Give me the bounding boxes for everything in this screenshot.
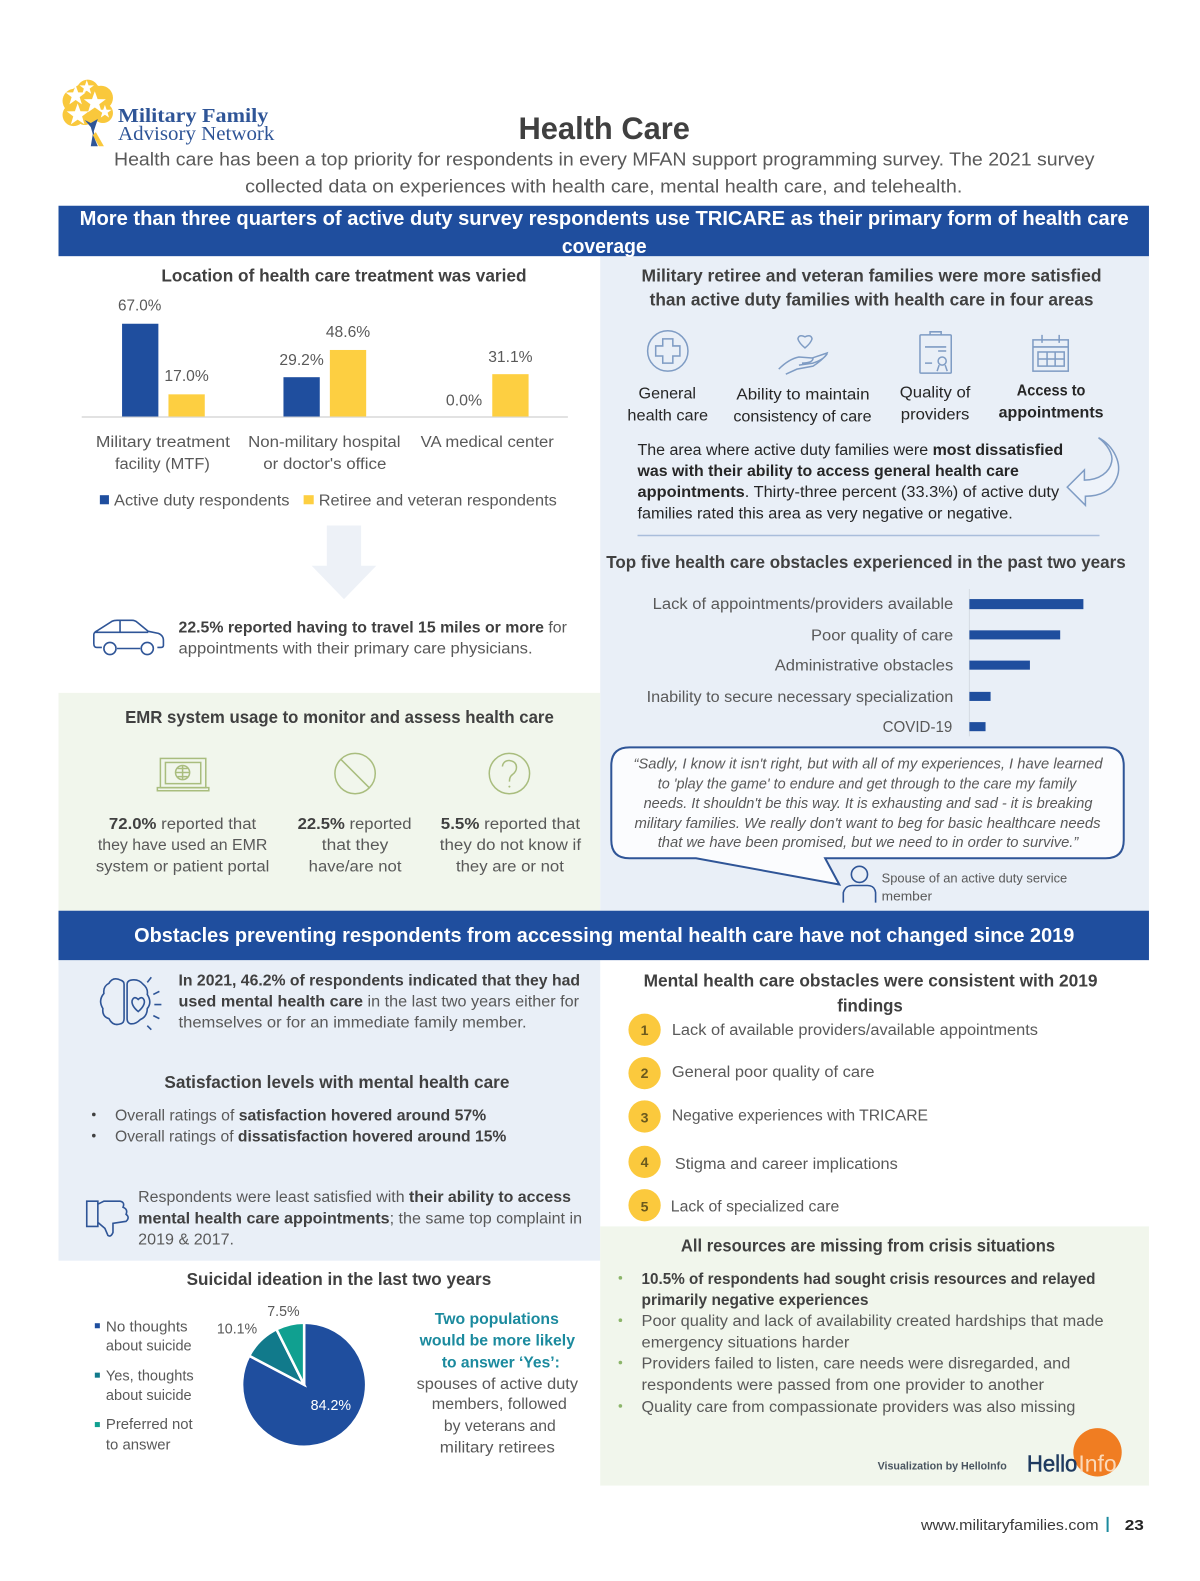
bar chart: top obstacles: Inability to secure necessary specialization [647, 688, 953, 706]
stat: have not: 22.5% reported [298, 815, 412, 833]
intro text: Health care has been a top priority for respondents in every MFAN support programming survey. The 2021 survey [114, 149, 1095, 169]
label: general health care: health care [627, 407, 708, 425]
icon: prohibited [335, 753, 375, 794]
title: Health Care [518, 111, 690, 146]
logo: Military Family Advisory Network: Military Family [118, 105, 268, 127]
bar chart: top obstacles: Administrative obstacles [775, 657, 953, 675]
dissatisfaction text: appointments. Thirty-three percent (33.3%) of active duty [638, 483, 1060, 501]
label: access to appointments: appointments [999, 404, 1104, 422]
bar chart: top obstacles: Lack of appointments/providers available [653, 595, 953, 613]
bar chart: top obstacles: Poor quality of care [811, 626, 953, 644]
label: access to appointments: Access to [1017, 381, 1086, 399]
crisis bullet 2 [619, 1312, 1104, 1351]
item 4: Stigma and career implications [675, 1155, 898, 1173]
quote attribution [882, 870, 1067, 904]
icon: brain with heart [101, 977, 161, 1030]
item 4: 4 [641, 1154, 649, 1170]
stat: have not [298, 815, 412, 875]
quote attribution: Spouse of an active duty service [882, 870, 1067, 885]
callout: populations: military retirees [440, 1438, 555, 1456]
callout: travel distance [94, 618, 568, 658]
dissatisfaction text: The area where active duty families were most dissatisfied [638, 441, 1063, 459]
callout: populations: Two populations [435, 1310, 559, 1328]
list heading: Mental health care obstacles were consistent with 2019 [644, 970, 1098, 990]
crisis bullet 2: Poor quality and lack of availability created hardships that made [642, 1312, 1104, 1330]
item 3: 3 [641, 1110, 649, 1126]
quote attribution: member [882, 889, 933, 904]
stat: do not know: they are or not [456, 857, 564, 875]
credit: HelloInfo [878, 1428, 1122, 1477]
bar chart: 0.0% [446, 391, 482, 409]
bar chart [82, 297, 568, 473]
bar chart: top obstacles: COVID-19 [883, 718, 952, 736]
crisis heading: All resources are missing from crisis situations [681, 1236, 1055, 1256]
pie chart: 10.1% [217, 1320, 257, 1337]
satisfaction heading [642, 265, 1102, 310]
pie legend: No thoughts [106, 1318, 188, 1335]
travel text: 22.5% reported having to travel 15 miles or more for [179, 618, 568, 636]
crisis bullet 1 [619, 1270, 1095, 1309]
crisis bullet 3 [619, 1355, 1070, 1394]
satisfaction bullets: Overall ratings of satisfaction hovered around 57% [115, 1106, 486, 1124]
satisfaction heading: than active duty families with health care in four areas [650, 290, 1093, 310]
footer: website and page number: 23 [1125, 1517, 1144, 1534]
satisfaction heading: Military retiree and veteran families were more satisfied [642, 265, 1102, 285]
banner: mental health obstacles: Obstacles preventing respondents from accessing mental health care have not changed since 2019 [134, 925, 1074, 947]
least satisfied text: 2019 & 2017. [138, 1231, 234, 1249]
callout: populations: to answer ‘Yes’: [442, 1354, 560, 1372]
stat: do not know: 5.5% reported that [441, 815, 581, 833]
callout: populations: spouses of active duty [417, 1375, 579, 1393]
mental health use text [179, 971, 580, 1032]
pie legend: to answer [106, 1436, 170, 1453]
bar chart: facility (MTF) [115, 455, 210, 473]
label: access to appointments [999, 381, 1104, 422]
callout: spouse quote: needs. It shouldn't be this way. It is exhausting and sad - it is breaking [644, 795, 1093, 812]
credit: HelloInfo: Info [1078, 1450, 1117, 1476]
list heading [644, 970, 1098, 1016]
stat: used EMR: system or patient portal [96, 857, 269, 875]
banner: TRICARE [59, 206, 1149, 258]
logo: Military Family Advisory Network: Advisory Network [118, 123, 275, 145]
icon: calendar [1033, 335, 1068, 371]
banner: TRICARE: More than three quarters of active duty survey respondents use TRICARE as their primary form of health care [80, 208, 1129, 230]
least satisfied text [138, 1188, 582, 1249]
pie legend: about suicide [106, 1387, 192, 1404]
dissatisfaction text: families rated this area as very negative or negative. [638, 504, 1013, 522]
mental health use text: used mental health care in the last two years either for [179, 993, 580, 1011]
panel: crisis resources [619, 1236, 1104, 1416]
label: general health care: General [639, 384, 696, 402]
crisis bullet 2: emergency situations harder [642, 1333, 850, 1351]
crisis bullet 1: primarily negative experiences [642, 1291, 869, 1309]
credit: HelloInfo: Visualization by HelloInfo [878, 1460, 1007, 1472]
crisis bullet 4: Quality care from compassionate providers was also missing [642, 1398, 1075, 1416]
footer: website and page number: www.militaryfamilies.com [920, 1518, 1099, 1534]
callout: populations [417, 1310, 579, 1456]
bar chart: 17.0% [164, 367, 209, 385]
bar chart: VA medical center [421, 433, 554, 451]
stat: have not: have/are not [309, 857, 402, 875]
icon: person [843, 866, 876, 903]
pie legend [95, 1318, 194, 1453]
item 5: 5 [641, 1198, 649, 1214]
chart legend [100, 491, 557, 509]
callout: populations: by veterans and [444, 1417, 556, 1435]
item 5 [628, 1189, 839, 1221]
stat: do not know [440, 815, 582, 875]
footer: website and page number [920, 1517, 1144, 1534]
item 2: 2 [641, 1065, 649, 1081]
dissatisfaction text [637, 441, 1063, 522]
panel backgrounds [59, 256, 1149, 1486]
label: consistency of care: consistency of care [733, 408, 872, 426]
panel: suicidal ideation [95, 1269, 579, 1456]
EMR heading: EMR system usage to monitor and assess health care [125, 707, 554, 727]
icon: thumbs down [87, 1201, 128, 1236]
icon: medical cross [648, 331, 688, 371]
pie legend: Yes, thoughts [106, 1368, 194, 1385]
satisfaction levels heading: Satisfaction levels with mental health care [164, 1072, 509, 1092]
stat: do not know: they do not know if [440, 836, 582, 854]
bar chart: 48.6% [326, 323, 370, 341]
satisfaction bullets: Overall ratings of dissatisfaction hovered around 15% [115, 1128, 506, 1146]
panel: location of treatment chart [82, 265, 568, 509]
label: consistency of care [733, 385, 872, 426]
callout: spouse quote [611, 747, 1124, 884]
mental health use text: themselves or for an immediate family member. [179, 1014, 527, 1032]
bar chart: Military treatment [96, 433, 231, 451]
arrow: down [312, 525, 376, 599]
icon: clipboard certificate [920, 332, 951, 373]
item 2: General poor quality of care [672, 1063, 875, 1081]
panel: retiree and veteran satisfaction [606, 265, 1126, 904]
item 4 [628, 1146, 898, 1178]
item 5: Lack of specialized care [671, 1197, 839, 1215]
panel: mental health care use [87, 971, 582, 1249]
intro text: collected data on experiences with health care, mental health care, and telehealth. [245, 177, 962, 197]
icon: laptop [157, 758, 209, 791]
pie chart [217, 1303, 366, 1447]
callout: spouse quote: military families. We really don't want to beg for basic healthcare needs [634, 815, 1101, 832]
bar chart: or doctor's office [263, 455, 386, 473]
least satisfied text: Respondents were least satisfied with their ability to access [138, 1188, 571, 1206]
chart legend: Active duty respondents [114, 491, 290, 509]
bar chart: Non-military hospital [248, 433, 400, 451]
item 3 [628, 1100, 928, 1133]
bar chart: 31.1% [488, 348, 533, 366]
least satisfied text: mental health care appointments; the same top complaint in [138, 1209, 582, 1227]
pie chart: 7.5% [267, 1303, 300, 1320]
crisis bullet 1: 10.5% of respondents had sought crisis resources and relayed [642, 1270, 1095, 1288]
item 3: Negative experiences with TRICARE [672, 1106, 928, 1124]
item 2 [628, 1057, 875, 1089]
label: general health care [627, 384, 708, 425]
callout: populations: would be more likely [419, 1331, 575, 1349]
pie chart: 84.2% [311, 1397, 351, 1414]
arrow: curved back [1067, 438, 1119, 505]
mental health use text: In 2021, 46.2% of respondents indicated that they had [179, 971, 580, 989]
chart heading: Location of health care treatment was varied [161, 265, 527, 285]
label: quality of providers: Quality of [900, 383, 971, 401]
stat: have not: that they [322, 836, 389, 854]
panel: EMR usage [96, 707, 582, 875]
callout: spouse quote: to 'play the game' to endure and get through to the care my family [658, 776, 1078, 793]
intro text [114, 149, 1095, 197]
travel text: appointments with their primary care physicians. [179, 640, 533, 658]
logo: Military Family Advisory Network [63, 80, 275, 146]
crisis bullet 3: Providers failed to listen, care needs were disregarded, and [642, 1355, 1070, 1373]
callout: spouse quote: that we have been promised, but we need to in order to survive.” [658, 834, 1079, 851]
list heading: findings [837, 996, 903, 1016]
icon: car [94, 620, 163, 655]
item 1 [628, 1014, 1038, 1046]
banner: mental health obstacles [59, 911, 1149, 960]
icon: hand with heart [779, 336, 827, 374]
banner: TRICARE: coverage [562, 236, 647, 258]
item 1: 1 [641, 1022, 649, 1038]
callout: spouse quote: “Sadly, I know it isn't right, but with all of my experiences, I have learned [633, 756, 1103, 773]
callout: populations: members, followed [432, 1395, 567, 1413]
stat: used EMR [96, 815, 269, 875]
panel: mental health obstacles list [628, 970, 1098, 1221]
ideation heading: Suicidal ideation in the last two years [187, 1269, 491, 1289]
stat: used EMR: 72.0% reported that [109, 815, 257, 833]
label: quality of providers: providers [901, 406, 969, 424]
crisis bullet 3: respondents were passed from one provider to another [642, 1376, 1045, 1394]
obstacles heading: Top five health care obstacles experienced in the past two years [606, 552, 1126, 572]
chart legend: Retiree and veteran respondents [319, 491, 557, 509]
pie legend: Preferred not [106, 1416, 193, 1433]
icon: question mark [489, 753, 530, 794]
satisfaction bullets [92, 1106, 506, 1146]
item 1: Lack of available providers/available appointments [672, 1021, 1038, 1039]
label: quality of providers [900, 383, 971, 424]
label: consistency of care: Ability to maintain [736, 385, 870, 403]
travel text [179, 618, 568, 658]
pie legend: about suicide [106, 1337, 192, 1354]
bar chart: 67.0% [118, 297, 161, 315]
bar chart: 29.2% [279, 351, 324, 369]
dissatisfaction text: was with their ability to access general health care [637, 462, 1019, 480]
bar chart: top obstacles [647, 589, 1083, 736]
stat: used EMR: they have used an EMR [98, 836, 267, 854]
credit: HelloInfo: Hello [1027, 1450, 1077, 1476]
